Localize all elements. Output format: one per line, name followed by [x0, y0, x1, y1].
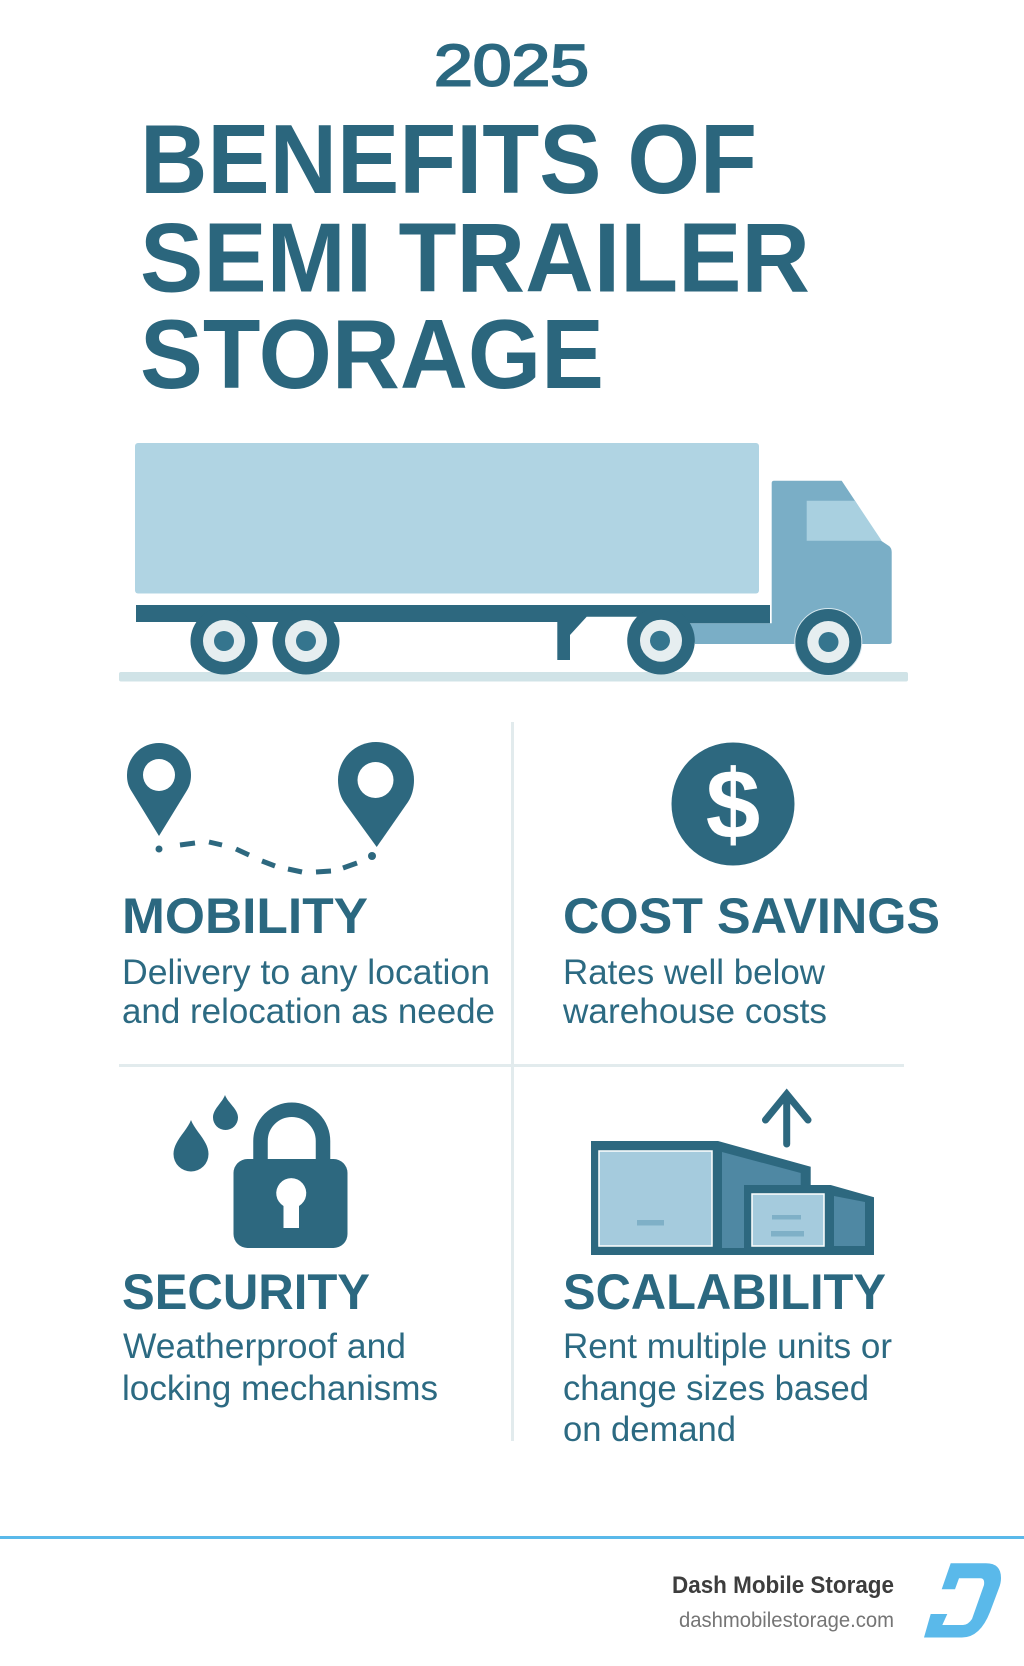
illustration: semi trailer truck	[119, 443, 908, 682]
rear wheel two	[272, 608, 340, 674]
icon: growing storage units with up arrow	[591, 1094, 874, 1255]
panel: cost savings	[562, 742, 940, 1031]
icon: dollar coin	[672, 742, 794, 866]
description: scalability: Rent multiple units or	[563, 1327, 892, 1366]
description: scalability: change sizes based	[563, 1369, 869, 1408]
front wheel	[795, 608, 862, 676]
description: scalability: on demand	[563, 1410, 736, 1449]
logo: stylised D	[924, 1563, 1001, 1638]
description: scalability	[563, 1327, 892, 1449]
cab	[690, 481, 892, 644]
trailer box	[135, 443, 759, 594]
icon: padlock with water drops	[174, 1095, 348, 1248]
panel: mobility	[122, 742, 495, 1031]
description: mobility: Delivery to any location	[122, 953, 490, 992]
panel: scalability	[563, 1094, 892, 1449]
cab window	[807, 501, 882, 541]
heading: scalability: SCALABILITY	[563, 1264, 886, 1320]
brand name: Dash Mobile Storage	[672, 1572, 894, 1599]
heading: cost savings: COST SAVINGS	[563, 888, 940, 944]
title: STORAGE	[140, 299, 604, 409]
rear wheel one	[190, 608, 258, 674]
description: cost savings: Rates well below	[563, 953, 826, 992]
heading: mobility: MOBILITY	[122, 888, 368, 944]
chassis	[136, 605, 770, 660]
title: BENEFITS OF	[140, 104, 757, 214]
description: security: Weatherproof and	[123, 1327, 406, 1366]
year heading: 2025	[434, 34, 589, 98]
title: SEMI TRAILER	[140, 202, 810, 312]
description: cost savings	[562, 953, 827, 1031]
description: cost savings: warehouse costs	[562, 992, 827, 1031]
ground line	[119, 672, 908, 682]
middle wheel	[627, 607, 695, 674]
heading: security: SECURITY	[122, 1264, 370, 1320]
description: mobility	[122, 953, 495, 1031]
title	[140, 104, 810, 409]
footer	[0, 1536, 1024, 1638]
description: security: locking mechanisms	[122, 1369, 438, 1408]
description: security	[122, 1327, 438, 1408]
panel: security	[122, 1095, 438, 1408]
icon: dollar coin: $	[706, 749, 760, 859]
website: dashmobilestorage.com	[679, 1609, 894, 1632]
description: mobility: and relocation as neede	[122, 992, 495, 1031]
icon: route between two map pins	[127, 742, 414, 872]
